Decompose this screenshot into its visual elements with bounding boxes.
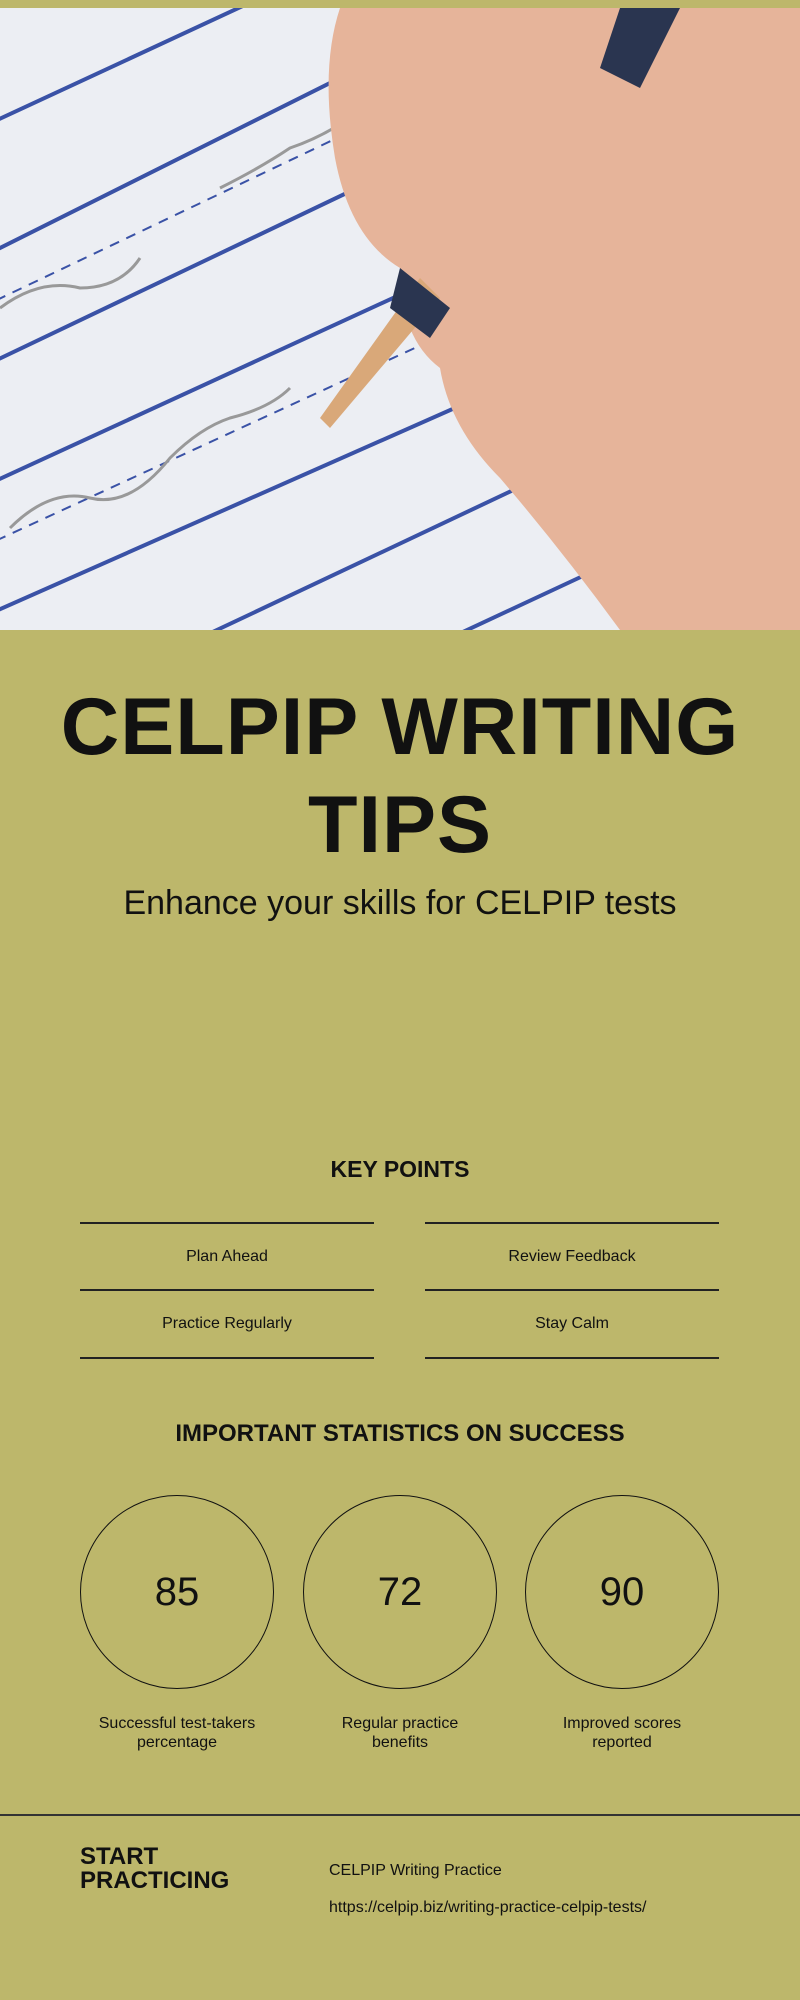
hero photo: hand writing on lined paper	[0, 8, 800, 630]
stat 72	[303, 1495, 497, 1689]
footer: link text: CELPIP Writing Practice	[329, 1862, 502, 1879]
footer: link text: https://celpip.biz/writing-practice-celpip-tests/	[329, 1899, 646, 1916]
stat 90	[525, 1495, 719, 1689]
key point: practice regularly	[80, 1289, 374, 1359]
key point: review feedback: Review Feedback	[508, 1248, 636, 1265]
key point: practice regularly: Practice Regularly	[162, 1315, 292, 1332]
heading: key points: KEY POINTS	[331, 1156, 469, 1182]
key point: plan ahead: Plan Ahead	[186, 1248, 268, 1265]
key point: stay calm	[425, 1289, 719, 1359]
label 90: Improved scores reported	[563, 1715, 681, 1751]
stat 85: 85	[155, 1570, 199, 1614]
label 72: Regular practice benefits	[342, 1715, 458, 1751]
footer: start practicing	[80, 1843, 229, 1894]
label 85: Successful test-takers percentage	[99, 1715, 255, 1751]
panel: statistics circles	[80, 1495, 719, 1751]
footer: link text	[329, 1862, 646, 1916]
key point: stay calm: Stay Calm	[535, 1315, 609, 1332]
hand	[329, 8, 800, 630]
heading: statistics: IMPORTANT STATISTICS ON SUCCESS	[175, 1420, 625, 1447]
footer: start practicing: PRACTICING	[80, 1867, 229, 1894]
key point: review feedback	[425, 1222, 719, 1290]
title: CELPIP WRITING	[61, 682, 739, 772]
stat 90: 90	[600, 1570, 644, 1614]
title	[61, 682, 739, 870]
subtitle: Enhance your skills for CELPIP tests	[123, 884, 677, 922]
title: TIPS	[308, 780, 492, 870]
key point: plan ahead	[80, 1222, 374, 1290]
panel: key points list	[80, 1222, 719, 1359]
stat 85	[80, 1495, 274, 1689]
footer: start practicing: START	[80, 1843, 158, 1870]
stat 72: 72	[378, 1570, 422, 1614]
